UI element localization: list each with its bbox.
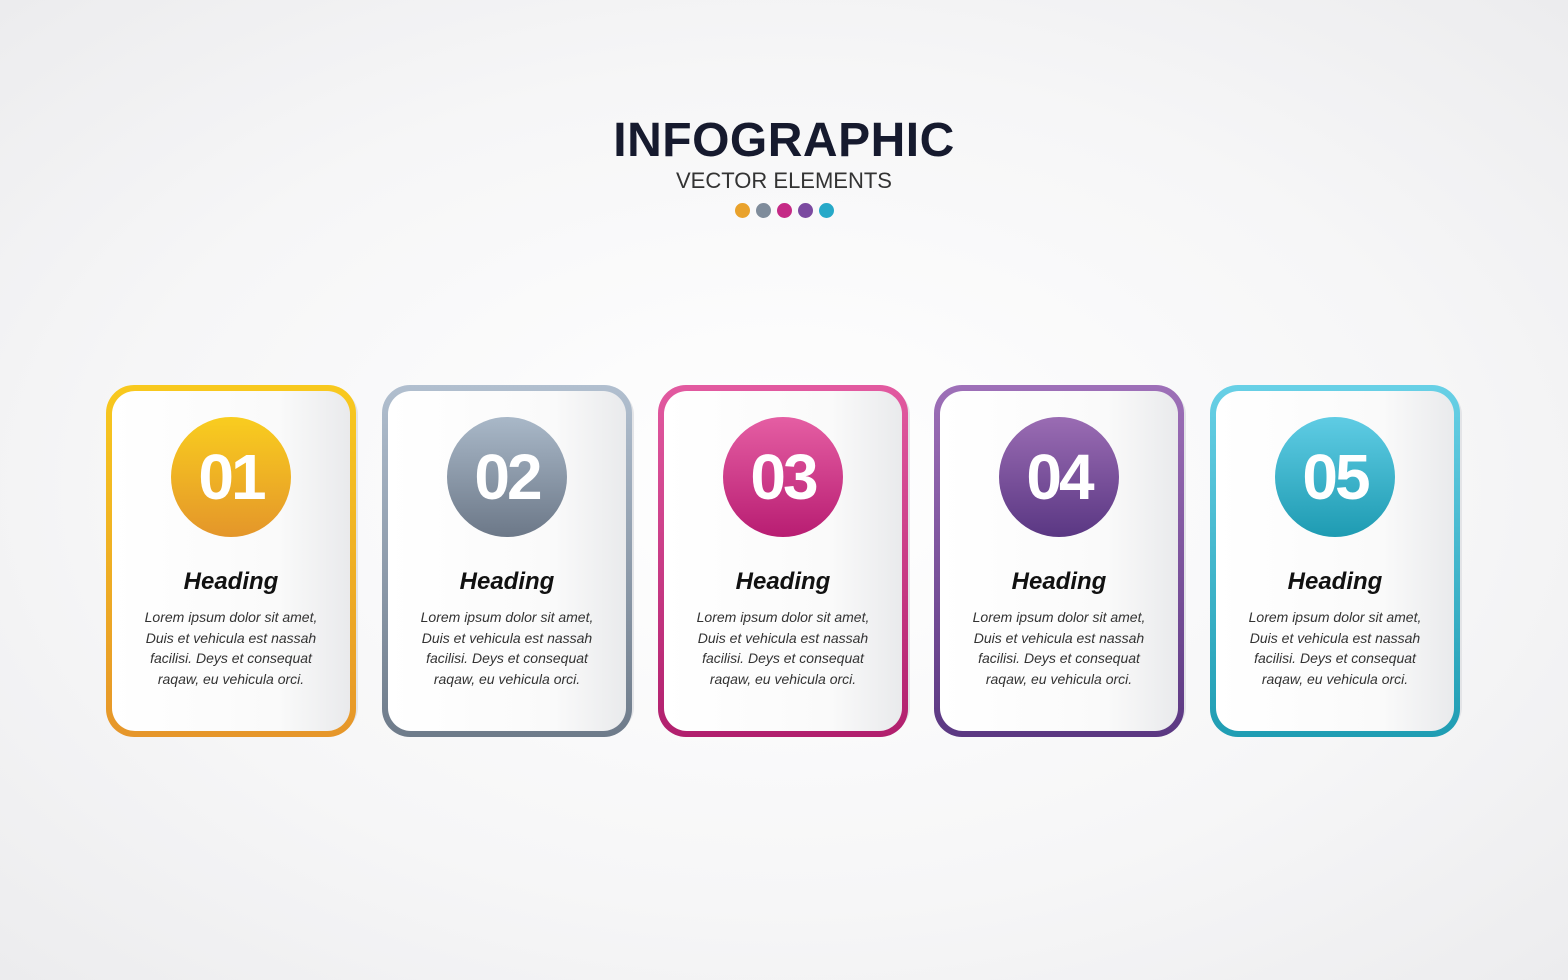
text: Lorem ipsum dolor sit amet, — [1249, 609, 1421, 625]
text: Lorem ipsum dolor sit amet, — [421, 609, 593, 625]
number circle 04: 04 — [1026, 441, 1092, 513]
color dots — [735, 203, 834, 218]
text: Lorem ipsum dolor sit amet, — [697, 609, 869, 625]
text — [697, 609, 869, 687]
number circle 02 — [447, 417, 567, 537]
text: raqaw, eu vehicula orci. — [158, 671, 304, 687]
heading: Heading — [184, 568, 278, 595]
text: Duis et vehicula est nassah — [974, 630, 1144, 646]
text — [421, 609, 593, 687]
number circle 02: 02 — [474, 441, 540, 513]
text: Duis et vehicula est nassah — [698, 630, 868, 646]
text: Duis et vehicula est nassah — [1250, 630, 1420, 646]
number circle 05 — [1275, 417, 1395, 537]
text: facilisi. Deys et consequat — [1254, 650, 1416, 666]
text: Duis et vehicula est nassah — [422, 630, 592, 646]
panel: 03 — [658, 385, 910, 737]
number circle 03: 03 — [750, 441, 816, 513]
number circle 01: 01 — [198, 441, 264, 513]
heading: Heading — [460, 568, 554, 595]
text — [1249, 609, 1421, 687]
text — [973, 609, 1145, 687]
text: Lorem ipsum dolor sit amet, — [145, 609, 317, 625]
heading: Heading — [1288, 568, 1382, 595]
heading: Heading — [1012, 568, 1106, 595]
text: facilisi. Deys et consequat — [978, 650, 1140, 666]
panel: 05 — [1210, 385, 1462, 737]
subtitle: VECTOR ELEMENTS — [676, 168, 892, 193]
panel: 04 — [934, 385, 1186, 737]
number circle 05: 05 — [1302, 441, 1368, 513]
text: Lorem ipsum dolor sit amet, — [973, 609, 1145, 625]
text: facilisi. Deys et consequat — [426, 650, 588, 666]
text: facilisi. Deys et consequat — [150, 650, 312, 666]
text: raqaw, eu vehicula orci. — [1262, 671, 1408, 687]
text: raqaw, eu vehicula orci. — [710, 671, 856, 687]
text: raqaw, eu vehicula orci. — [434, 671, 580, 687]
text: raqaw, eu vehicula orci. — [986, 671, 1132, 687]
panel: 02 — [382, 385, 634, 737]
text: Duis et vehicula est nassah — [146, 630, 316, 646]
panel: 01 — [106, 385, 358, 737]
heading: Heading — [736, 568, 830, 595]
number circle 03 — [723, 417, 843, 537]
text — [145, 609, 317, 687]
number circle 01 — [171, 417, 291, 537]
title: INFOGRAPHIC — [613, 114, 955, 167]
text: facilisi. Deys et consequat — [702, 650, 864, 666]
number circle 04 — [999, 417, 1119, 537]
